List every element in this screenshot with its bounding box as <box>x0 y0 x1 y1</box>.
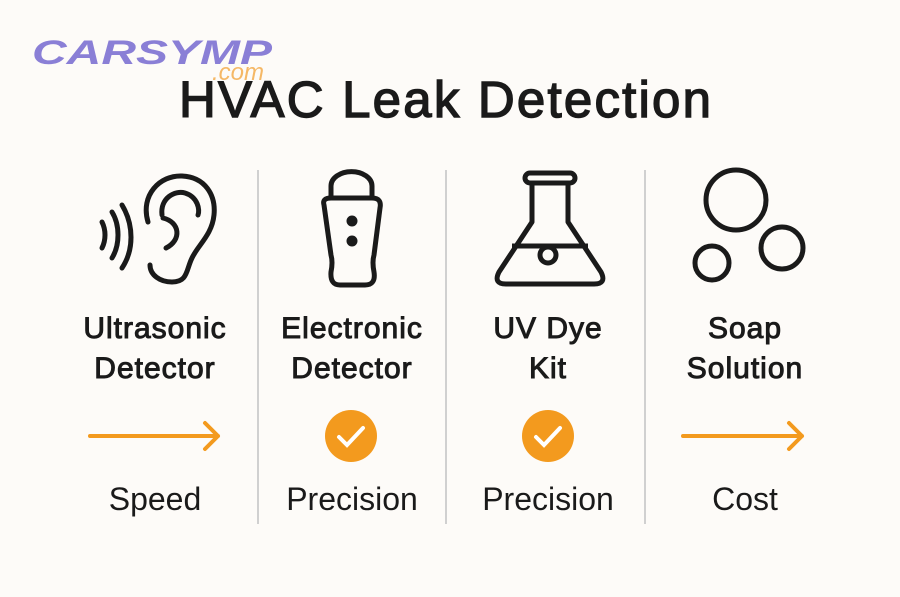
check icons <box>325 410 574 462</box>
bottom labels: Speed <box>109 481 201 517</box>
labels: Solution <box>687 352 803 385</box>
icon: ear <box>102 176 214 282</box>
arrows <box>90 423 802 449</box>
icon: electronic detector <box>324 172 380 285</box>
icon: bubbles <box>695 170 803 280</box>
labels: Ultrasonic <box>83 312 227 345</box>
logo <box>32 34 272 86</box>
title: HVAC Leak Detection <box>179 71 711 128</box>
bottom labels <box>109 481 778 517</box>
bottom labels: Precision <box>286 481 418 517</box>
labels: Kit <box>529 352 567 385</box>
icon: flask <box>497 173 603 284</box>
logo: .com <box>212 59 264 86</box>
logo: CARSYMP <box>32 34 272 72</box>
bottom labels: Cost <box>712 481 778 517</box>
bottom labels: Precision <box>482 481 614 517</box>
labels: Soap <box>708 312 782 345</box>
labels: Detector <box>94 352 216 385</box>
labels: UV Dye <box>493 312 603 345</box>
labels <box>83 312 803 385</box>
labels: Electronic <box>281 312 423 345</box>
labels: Detector <box>291 352 413 385</box>
